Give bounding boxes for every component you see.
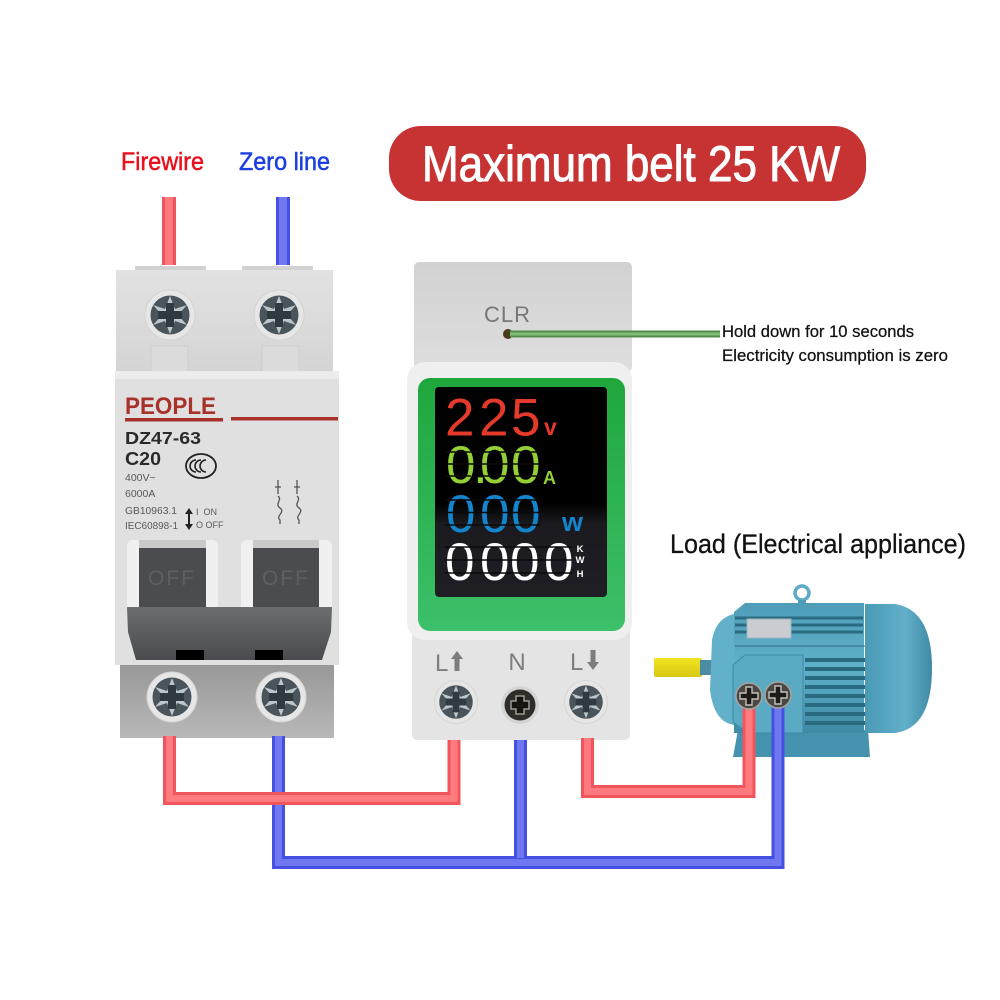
callout text: Hold down for 10 seconds [722, 322, 914, 341]
terminal labels [435, 649, 599, 677]
motor base [733, 730, 870, 757]
title banner [389, 126, 866, 201]
reading: current: 0.00 [446, 436, 540, 495]
reading: energy: W [576, 555, 585, 566]
reading: voltage: v [544, 414, 557, 440]
reading: energy: H [577, 569, 584, 580]
breaker top screws [145, 290, 304, 340]
reading: voltage: 225 [445, 388, 540, 448]
breaker model text: O OFF [196, 520, 224, 530]
wire: neutral bus [278, 706, 778, 862]
circuit symbol [275, 480, 301, 524]
breaker toggle right [241, 540, 332, 612]
meter terminal screws [434, 680, 608, 724]
title banner: Maximum belt 25 KW [422, 136, 841, 192]
meter screen [435, 387, 607, 597]
breaker model text: I ON [196, 507, 217, 517]
label: load: Load (Electrical appliance) [670, 529, 966, 559]
terminal labels: L [570, 649, 583, 676]
wire: meter to load [588, 706, 749, 792]
callout text: Electricity consumption is zero [722, 346, 948, 365]
reading: power [446, 485, 584, 544]
motor [654, 586, 932, 757]
breaker brand [125, 393, 338, 422]
callout line: CLR button [503, 329, 720, 339]
breaker model text: C20 [125, 449, 161, 469]
label: zero line: Zero line [239, 148, 330, 176]
motor terminal screws [736, 682, 791, 709]
breaker model text: DZ47-63 [125, 428, 201, 448]
breaker toggle left [127, 540, 218, 612]
wire: breaker to meter [170, 736, 454, 798]
callout text [722, 322, 948, 365]
energy meter [407, 262, 632, 740]
reading: energy: 0000 [445, 533, 573, 592]
wire: incoming firewire [162, 197, 176, 265]
icon: CCC mark [186, 454, 216, 478]
breaker model text: GB10963.1 [125, 505, 177, 517]
motor terminal box [733, 655, 803, 733]
reading: power: 000 [446, 485, 540, 544]
icon: on-off arrow [185, 508, 193, 530]
breaker model text: IEC60898-1 [125, 520, 178, 532]
breaker bottom screws [147, 672, 306, 722]
meter green bezel [418, 378, 625, 631]
terminal labels: L [435, 650, 448, 677]
reading: energy: K [577, 544, 584, 555]
reading: power: w [561, 507, 584, 537]
breaker toggle left: OFF [148, 567, 196, 590]
reading: current: A [543, 468, 556, 488]
breaker brand: PEOPLE [125, 393, 216, 420]
breaker lever bar [127, 607, 332, 660]
breaker model text [125, 428, 224, 532]
label: CLR: CLR [484, 302, 531, 327]
motor lifting eye [795, 586, 809, 605]
motor nameplate [747, 619, 791, 638]
label: firewire: Firewire [121, 148, 204, 176]
motor end cap [865, 604, 932, 733]
motor front shield [710, 614, 734, 725]
wire: incoming zero line [276, 197, 290, 265]
breaker toggle right: OFF [262, 567, 310, 590]
breaker model text: 400V~ [125, 472, 156, 484]
circuit breaker [115, 266, 339, 738]
motor cooling fins [735, 618, 868, 723]
breaker model text: 6000A [125, 488, 155, 500]
terminal labels: N [508, 649, 526, 676]
motor frame [734, 603, 864, 733]
motor shaft [654, 658, 714, 677]
